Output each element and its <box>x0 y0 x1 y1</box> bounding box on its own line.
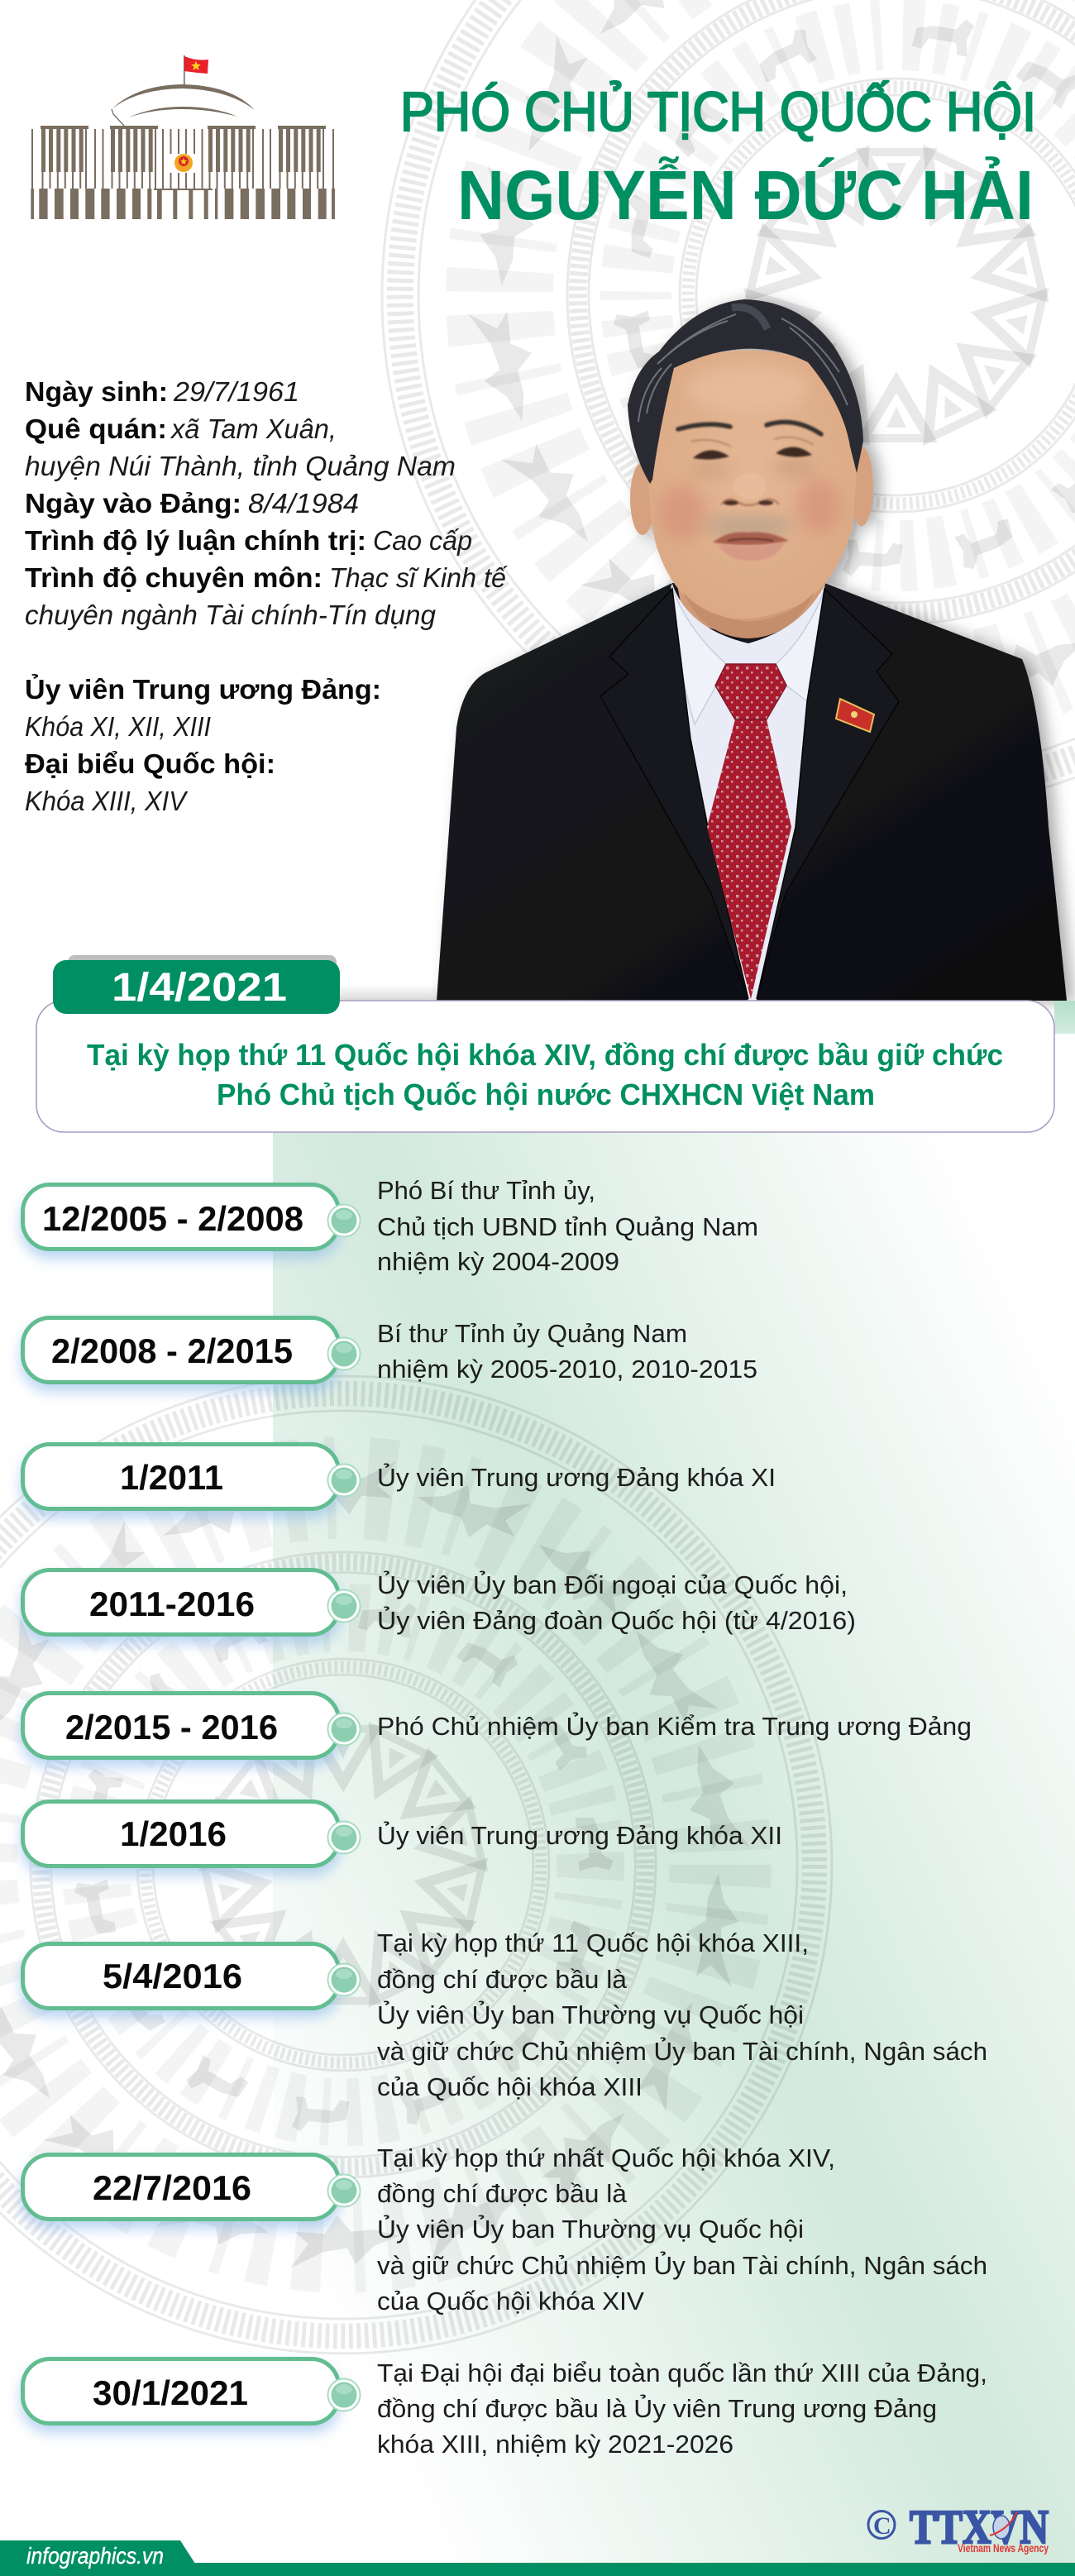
hair highlights <box>638 308 848 422</box>
timeline item: 22/7/2016 <box>23 2143 987 2316</box>
title <box>400 80 1036 234</box>
logo: TTXVN Vietnam News Agency: C <box>873 2512 891 2540</box>
timeline item: 5/4/2016: Ủy viên Ủy ban Thường vụ Quốc hội <box>377 2000 804 2029</box>
logo: TTXVN Vietnam News Agency: TTXVN <box>910 2500 1049 2554</box>
timeline item: 5/4/2016: của Quốc hội khóa XIII <box>377 2072 643 2101</box>
text block: personal details: Cao cấp <box>373 525 472 556</box>
text block: personal details: Ủy viên Trung ương Đảng: <box>25 674 381 705</box>
timeline item: 5/4/2016: và giữ chức Chủ nhiệm Ủy ban Tài chính, Ngân sách <box>377 2036 987 2066</box>
timeline item: 30/1/2021: Tại Đại hội đại biểu toàn quốc lần thứ XIII của Đảng, <box>377 2359 987 2387</box>
timeline item: 2/2008 - 2/2015: nhiệm kỳ 2005-2010, 2010-2015 <box>377 1355 757 1384</box>
timeline item: 12/2005 - 2/2008: nhiệm kỳ 2004-2009 <box>377 1247 619 1276</box>
background: bronze drum pattern lower left <box>0 1376 832 2354</box>
text block: personal details: Quê quán: <box>25 413 167 444</box>
timeline item: 22/7/2016: của Quốc hội khóa XIV <box>377 2287 644 2316</box>
forehead light <box>686 366 810 412</box>
timeline item: 22/7/2016: và giữ chức Chủ nhiệm Ủy ban Tài chính, Ngân sách <box>377 2250 987 2280</box>
text block: personal details: huyện Núi Thành, tỉnh Quảng Nam <box>25 451 456 481</box>
portrait photo of Nguyễn Đức Hải <box>437 299 1067 1001</box>
face <box>647 350 858 619</box>
callout text: Phó Chủ tịch Quốc hội nước CHXHCN Việt Nam <box>217 1078 875 1111</box>
timeline item: 2011-2016 <box>23 1570 856 1635</box>
timeline item: 5/4/2016: đồng chí được bầu là <box>377 1965 628 1994</box>
red patterned tie <box>707 664 791 999</box>
moustache shadow <box>704 517 793 535</box>
timeline item: 2/2008 - 2/2015 <box>23 1318 757 1384</box>
eyes <box>691 437 814 460</box>
text block: personal details: 8/4/1984 <box>248 488 359 519</box>
text block: personal details: Khóa XIII, XIV <box>25 786 189 816</box>
nose <box>721 473 779 505</box>
icon: national emblem <box>174 154 193 172</box>
timeline item: 30/1/2021: 30/1/2021 <box>93 2373 248 2412</box>
timeline item: 1/2011 <box>23 1444 776 1508</box>
timeline item: 12/2005 - 2/2008: Phó Bí thư Tỉnh ủy, <box>377 1176 595 1205</box>
date tab: 1/4/2021 <box>112 966 287 1010</box>
text block: personal details: Ngày vào Đảng: <box>25 488 241 519</box>
neck <box>671 554 830 634</box>
footer bar with infographics.vn tab <box>0 2540 1075 2576</box>
text block: personal details: Đại biểu Quốc hội: <box>25 748 275 779</box>
cheeks <box>659 478 840 541</box>
callout text: Tại kỳ họp thứ 11 Quốc hội khóa XIV, đồng chí được bầu giữ chức <box>87 1038 1003 1072</box>
shirt <box>671 581 824 1001</box>
timeline item: 12/2005 - 2/2008: 12/2005 - 2/2008 <box>42 1199 303 1238</box>
timeline item: 30/1/2021: đồng chí được bầu là Ủy viên Trung ương Đảng <box>377 2393 937 2423</box>
text block: personal details: Trình độ lý luận chính trị: <box>25 525 366 556</box>
timeline item: 1/2016: 1/2016 <box>120 1814 227 1853</box>
suit jacket <box>437 583 1067 1001</box>
date tab <box>53 960 340 1014</box>
footer bar with infographics.vn tab: infographics.vn <box>26 2543 164 2569</box>
icon: delegate lapel pin <box>836 699 874 732</box>
callout text <box>87 1038 1003 1111</box>
timeline item: 5/4/2016 <box>23 1928 987 2101</box>
timeline item: 2011-2016: 2011-2016 <box>89 1584 255 1623</box>
timeline item: 2011-2016: Ủy viên Ủy ban Đối ngoại của Quốc hội, <box>377 1570 848 1599</box>
timeline item: 22/7/2016: Ủy viên Ủy ban Thường vụ Quốc hội <box>377 2214 804 2244</box>
text block: personal details: chuyên ngành Tài chính-Tín dụng <box>25 600 437 630</box>
timeline item: 22/7/2016: 22/7/2016 <box>93 2168 251 2207</box>
timeline item: 1/2011: Ủy viên Trung ương Đảng khóa XI <box>377 1462 776 1492</box>
text block: personal details: Ngày sinh: <box>25 376 168 407</box>
logo: TTXVN Vietnam News Agency <box>868 2500 1049 2554</box>
eyebrows <box>678 422 821 434</box>
timeline item: 2/2015 - 2016: Phó Chủ nhiệm Ủy ban Kiểm tra Trung ương Đảng <box>377 1711 972 1741</box>
timeline item: 30/1/2021 <box>23 2359 987 2459</box>
text block: personal details <box>25 376 509 816</box>
timeline item: 1/2016: Ủy viên Trung ương Đảng khóa XII <box>377 1820 782 1850</box>
shirt collar <box>671 585 726 724</box>
text block: personal details: Thạc sĩ Kinh tế <box>329 562 509 593</box>
timeline item: 5/4/2016: Tại kỳ họp thứ 11 Quốc hội khóa XIII, <box>377 1928 809 1957</box>
text block: personal details: 29/7/1961 <box>173 376 299 407</box>
timeline item: 2/2008 - 2/2015: Bí thư Tỉnh ủy Quảng Nam <box>377 1319 687 1348</box>
background: green diagonal gradient band <box>273 1132 1075 2563</box>
timeline item: 2/2008 - 2/2015: 2/2008 - 2/2015 <box>51 1331 293 1370</box>
jacket lapels <box>600 589 748 999</box>
timeline item: 2011-2016: Ủy viên Đảng đoàn Quốc hội (từ 4/2016) <box>377 1605 856 1635</box>
timeline item: 5/4/2016: 5/4/2016 <box>103 1957 242 1995</box>
timeline item: 22/7/2016: Tại kỳ họp thứ nhất Quốc hội khóa XIV, <box>377 2143 835 2172</box>
icon: red flag with yellow star <box>184 56 208 74</box>
timeline item: 2/2015 - 2016: 2/2015 - 2016 <box>65 1708 278 1747</box>
text block: personal details: Trình độ chuyên môn: <box>25 562 322 593</box>
eye bags <box>690 460 815 477</box>
icon: National Assembly building logo <box>31 55 335 219</box>
timeline item: 2/2015 - 2016 <box>23 1694 972 1758</box>
ears <box>630 462 655 535</box>
panel: election callout 1/4/2021 <box>36 955 1075 1132</box>
background: bronze drum pattern top right <box>382 0 1075 810</box>
text block: personal details: Khóa XI, XII, XIII <box>25 711 211 742</box>
timeline item: 22/7/2016: đồng chí được bầu là <box>377 2179 628 2208</box>
timeline item: 30/1/2021: khóa XIII, nhiệm kỳ 2021-2026 <box>377 2430 733 2459</box>
timeline item: 12/2005 - 2/2008 <box>23 1176 758 1276</box>
timeline item: 1/2016 <box>23 1801 782 1866</box>
title: PHÓ CHỦ TỊCH QUỐC HỘI <box>400 80 1036 143</box>
hair <box>628 299 863 484</box>
mouth <box>713 532 789 561</box>
title: NGUYỄN ĐỨC HẢI <box>457 156 1034 234</box>
timeline item: 1/2011: 1/2011 <box>120 1458 223 1497</box>
timeline item: 12/2005 - 2/2008: Chủ tịch UBND tỉnh Quảng Nam <box>377 1212 758 1241</box>
chin over collar <box>683 592 815 638</box>
text block: personal details: xã Tam Xuân, <box>170 413 337 444</box>
